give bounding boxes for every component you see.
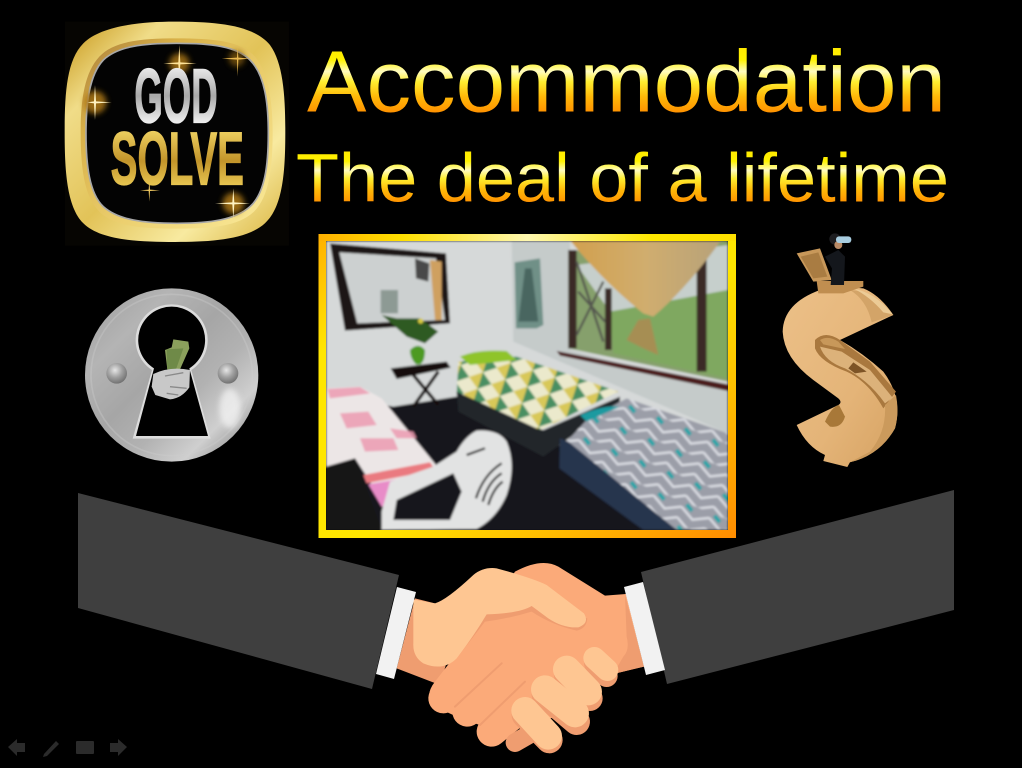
handshake illustration <box>78 490 954 743</box>
right hand wrist and body <box>429 563 644 730</box>
left hand back and thumb <box>413 568 586 667</box>
green bed <box>457 357 618 430</box>
plant and vase <box>382 315 438 343</box>
curtain <box>571 241 721 317</box>
open lid box on top <box>797 248 832 282</box>
top terminal shading <box>850 290 893 322</box>
wall poster <box>515 258 543 328</box>
subtitle: The deal of a lifetime: The deal of a lifetime <box>296 140 949 216</box>
walls <box>326 241 728 446</box>
icon: pen <box>43 741 59 757</box>
sparkles <box>84 45 250 218</box>
left-hand fingers <box>525 658 607 740</box>
photo: bedroom with three beds <box>326 241 728 530</box>
blue bed <box>567 398 728 530</box>
icon: menu <box>76 741 94 754</box>
panel: bedroom photo with gold frame <box>318 234 736 538</box>
photo frame <box>318 234 736 538</box>
left sleeve <box>78 493 399 689</box>
thumb shadow <box>457 605 587 658</box>
dollar sign silhouette <box>783 287 897 467</box>
lookout figure with binoculars <box>825 233 851 285</box>
window <box>568 241 728 382</box>
right sleeve <box>641 490 954 684</box>
money notes <box>165 339 189 369</box>
centre hole and diagonal band <box>815 335 896 408</box>
lower fingers of right hand <box>443 663 528 743</box>
logo text: SOLVE: SOLVE <box>111 116 244 200</box>
left wrist shadow <box>397 598 460 685</box>
window sill <box>557 351 728 391</box>
small silver handshake <box>152 369 190 399</box>
logo: God Solve gold badge <box>65 22 289 246</box>
white chair <box>382 430 512 530</box>
left cuff <box>376 587 416 679</box>
side table <box>391 362 451 379</box>
pink bed <box>326 388 437 486</box>
dark cabinet <box>326 459 382 530</box>
title: Accommodation: Accommodation <box>307 34 946 130</box>
icon: gold dollar sign with lookout figure <box>783 233 897 467</box>
icon: forward arrow <box>110 739 127 756</box>
right side edge <box>850 395 897 462</box>
mirror <box>330 243 450 331</box>
right cuff <box>624 582 665 675</box>
hands <box>397 563 644 743</box>
lower hole <box>825 405 845 427</box>
navigation controls <box>8 739 127 757</box>
icon: back arrow <box>8 739 25 756</box>
icon: silver keyhole coin with handshake and money <box>85 288 258 462</box>
logo: God Solve gold badge: GOD <box>134 54 218 139</box>
